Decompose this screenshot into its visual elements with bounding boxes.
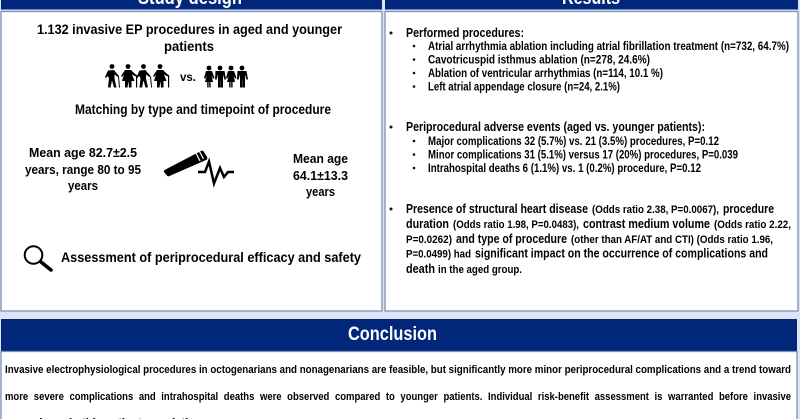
aged group mean age: years [68, 178, 98, 193]
predictors of complications text: (other than AF/AT and CTI) (Odds ratio 1.96, [571, 234, 773, 246]
predictors of complications text: (Odds ratio 2.22, [714, 219, 791, 231]
periprocedural adverse events list: Intrahospital deaths 6 (1.1%) vs. 1 (0.2%) procedure, P=0.12 [428, 161, 701, 175]
periprocedural adverse events list: Major complications 32 (5.7%) vs. 21 (3.5%) procedures, P=0.12 [428, 134, 719, 148]
predictors of complications text: in the aged group. [438, 264, 522, 276]
study population heading: patients [164, 39, 214, 54]
performed procedures list: Left atrial appendage closure (n=24, 2.1%) [428, 80, 620, 94]
predictors of complications text: death [406, 261, 435, 276]
predictors of complications text: contrast medium volume [583, 216, 710, 231]
conclusion body box [1, 352, 797, 419]
performed procedures list: Ablation of ventricular arrhythmias (n=114, 10.1 %) [428, 66, 663, 80]
icon: magnifying glass [25, 246, 51, 270]
panel: results [385, 0, 798, 311]
icon: younger patients [204, 66, 248, 88]
predictors of complications text: P=0.0499) had [406, 248, 471, 260]
aged group mean age [25, 145, 141, 193]
predictors of complications text [390, 201, 791, 276]
younger group mean age: Mean age [293, 151, 348, 166]
matching text: Matching by type and timepoint of procedure [75, 102, 331, 117]
predictors of complications text: procedure [723, 201, 774, 216]
predictors of complications text: (Odds ratio 2.38, P=0.0067), [592, 204, 719, 216]
periprocedural adverse events list [390, 119, 738, 175]
younger group mean age [293, 151, 348, 199]
predictors of complications text: Presence of structural heart disease [406, 201, 588, 216]
younger group mean age: 64.1±13.3 [293, 168, 348, 183]
study population heading: 1.132 invasive EP procedures in aged and younger [37, 22, 343, 37]
conclusion text [5, 364, 791, 419]
aged group mean age: Mean age 82.7±2.5 [29, 145, 137, 160]
icon: aged patients [105, 64, 169, 88]
study design header bar [1, 0, 382, 10]
predictors of complications text: duration [406, 216, 449, 231]
predictors of complications text: (Odds ratio 1.98, P=0.0483), [453, 219, 579, 231]
aged group mean age: years, range 80 to 95 [25, 162, 141, 177]
icon: catheter and ECG trace [164, 151, 234, 184]
study design body box [1, 12, 382, 311]
performed procedures list: Performed procedures: [406, 25, 524, 40]
performed procedures list: Cavotricuspid isthmus ablation (n=278, 24.6%) [428, 52, 650, 66]
study population heading [37, 22, 343, 54]
periprocedural adverse events list: Periprocedural adverse events (aged vs. younger patients): [406, 119, 705, 134]
assessment text: Assessment of periprocedural efficacy and safety [61, 250, 361, 265]
vs label: vs. [180, 70, 196, 84]
younger group mean age: years [306, 184, 335, 199]
performed procedures list [390, 25, 789, 94]
predictors of complications text: P=0.0262) [406, 234, 452, 246]
conclusion header bar: Conclusion [348, 324, 437, 345]
panel: conclusion [1, 319, 797, 419]
periprocedural adverse events list: Minor complications 31 (5.1%) versus 17 (20%) procedures, P=0.039 [428, 148, 738, 162]
predictors of complications text: and type of procedure [456, 231, 567, 246]
results body box [385, 12, 798, 311]
results header bar [385, 0, 798, 10]
panel: study design [1, 0, 382, 311]
conclusion header bar [1, 319, 797, 352]
